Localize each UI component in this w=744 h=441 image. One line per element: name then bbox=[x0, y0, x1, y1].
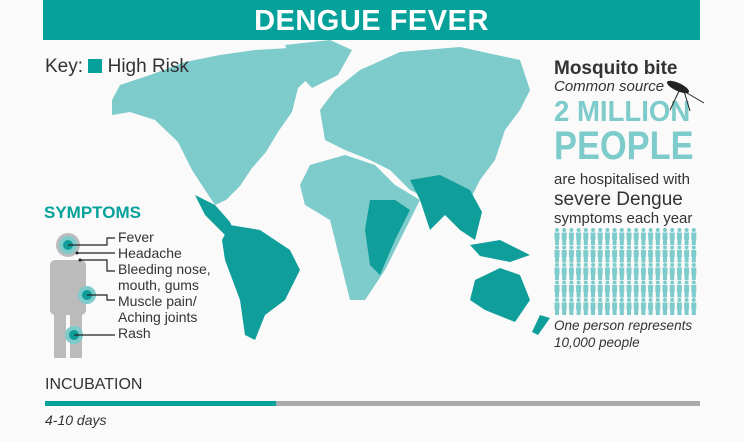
icon: mosquito bbox=[667, 80, 704, 112]
mosquito stats panel: Common source bbox=[554, 78, 664, 95]
incubation heading: INCUBATION bbox=[45, 376, 142, 393]
symptoms list: Bleeding nose, bbox=[118, 261, 211, 277]
mosquito stats panel: PEOPLE bbox=[554, 124, 694, 168]
mosquito stats panel bbox=[554, 58, 694, 227]
incubation days: 4-10 days bbox=[45, 412, 106, 428]
symptoms list: Fever bbox=[118, 229, 154, 245]
symptoms list: mouth, gums bbox=[118, 277, 199, 293]
mosquito stats panel: 2 MILLION bbox=[554, 96, 690, 128]
title bar bbox=[43, 0, 700, 40]
key legend: Key: High Risk bbox=[45, 56, 189, 77]
mosquito stats panel: symptoms each year bbox=[554, 210, 692, 227]
mosquito stats panel: severe Dengue bbox=[554, 189, 683, 210]
symptoms heading: SYMPTOMS bbox=[44, 203, 141, 222]
pictogram caption: One person represents bbox=[554, 318, 692, 333]
body figure with symptoms bbox=[50, 233, 115, 358]
symptoms list: Muscle pain/ bbox=[118, 293, 197, 309]
symptoms list bbox=[118, 229, 211, 341]
mosquito stats panel: are hospitalised with bbox=[554, 171, 690, 188]
mosquito stats panel: Mosquito bite bbox=[554, 58, 677, 79]
people pictogram grid bbox=[554, 228, 696, 315]
title bar: DENGUE FEVER bbox=[254, 5, 489, 37]
symptoms list: Rash bbox=[118, 325, 151, 341]
pictogram caption: 10,000 people bbox=[554, 335, 640, 350]
symptoms list: Headache bbox=[118, 245, 182, 261]
incubation bar bbox=[45, 401, 700, 406]
symptoms list: Aching joints bbox=[118, 309, 197, 325]
pictogram caption bbox=[554, 318, 692, 350]
